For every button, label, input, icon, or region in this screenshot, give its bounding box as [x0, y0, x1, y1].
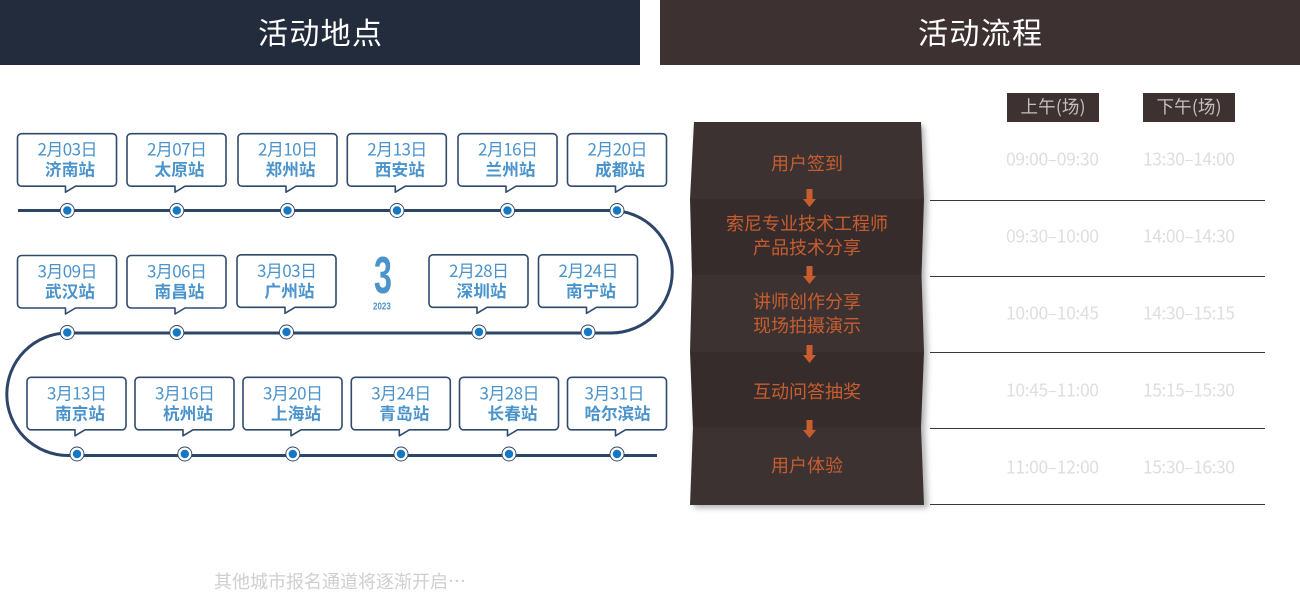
stop: 郑州站 — [238, 134, 337, 192]
times: afternoon: 15:15–15:30 — [1143, 378, 1235, 402]
stop: 南京站: 南京站 — [55, 400, 105, 424]
stop: 兰州站 — [458, 134, 557, 192]
stop: 南宁站: 南宁站 — [566, 278, 616, 302]
stop: 上海站: 上海站 — [271, 400, 321, 424]
stop: 深圳站 — [429, 255, 528, 313]
times: morning: 09:00–09:30 — [1006, 146, 1099, 172]
step text: 用户体验: 用户体验 — [771, 452, 843, 478]
times: afternoon: 15:30–16:30 — [1143, 454, 1235, 480]
stop: 兰州站: 兰州站 — [486, 157, 536, 181]
stop: 郑州站: 郑州站 — [266, 157, 316, 181]
column header: 上午(场) — [1007, 93, 1099, 122]
stop: 青岛站 — [351, 377, 450, 436]
stop: 杭州站: 杭州站 — [163, 400, 213, 424]
stop: 南宁站 — [538, 255, 638, 313]
step text: 索尼专业技术工程师 产品技术分享: 产品技术分享 — [753, 234, 861, 260]
times: morning: 11:00–12:00 — [1006, 454, 1099, 480]
step text: 索尼专业技术工程师 产品技术分享 — [726, 210, 888, 260]
stop: 广州站: 广州站 — [264, 278, 315, 302]
stop: 深圳站: 深圳站 — [456, 278, 507, 302]
times: morning: 09:30–10:00 — [1006, 224, 1099, 248]
stop: 杭州站: 3月16日 — [155, 379, 215, 404]
stop: 济南站 — [18, 134, 116, 192]
stop: 南昌站: 南昌站 — [154, 278, 205, 302]
stop: 南昌站: 3月06日 — [147, 258, 207, 282]
stop: 武汉站 — [18, 256, 116, 314]
stop: 太原站: 太原站 — [154, 157, 205, 181]
step text: 索尼专业技术工程师 产品技术分享: 索尼专业技术工程师 — [726, 210, 888, 236]
stop: 郑州站: 2月10日 — [258, 136, 318, 161]
stop: 南昌站 — [127, 256, 226, 314]
header: 活动流程: 活动流程 — [918, 9, 1042, 53]
times: morning: 10:45–11:00 — [1006, 378, 1099, 402]
stop: 西安站: 西安站 — [375, 157, 425, 181]
stop: 南宁站: 2月24日 — [558, 257, 618, 282]
times: afternoon: 14:30–15:15 — [1143, 300, 1235, 326]
route line — [7, 210, 672, 456]
stop: 广州站 — [237, 255, 336, 313]
stop: 武汉站: 武汉站 — [45, 278, 95, 302]
stop: 济南站: 2月03日 — [38, 136, 98, 161]
header: 活动流程 — [660, 0, 1300, 65]
times: morning — [1006, 146, 1099, 480]
column header: 下午(场) — [1143, 93, 1235, 122]
step text: 互动问答抽奖: 互动问答抽奖 — [753, 378, 861, 404]
step text: 用户签到: 用户签到 — [771, 150, 843, 176]
column header: 上午(场): 上午(场) — [1020, 94, 1086, 119]
stop: 杭州站 — [135, 377, 234, 436]
stop: 哈尔滨站 — [568, 377, 666, 436]
panel: folded process ribbon — [690, 122, 928, 508]
stop: 南京站: 3月13日 — [47, 379, 107, 404]
stop: 南京站 — [27, 377, 126, 436]
step text: 讲师创作分享 现场拍摄演示: 现场拍摄演示 — [753, 312, 861, 338]
stop: 成都站 — [568, 134, 666, 192]
year mark: 3 / 2023: 3 — [374, 247, 392, 305]
arrow 3 — [803, 345, 816, 363]
stop: 广州站: 3月03日 — [257, 257, 317, 282]
step text: 讲师创作分享 现场拍摄演示: 讲师创作分享 — [753, 288, 861, 314]
schedule rules — [930, 200, 1265, 504]
times: afternoon — [1143, 146, 1235, 480]
header: 活动地点 — [0, 0, 640, 65]
step text: 讲师创作分享 现场拍摄演示 — [753, 288, 861, 338]
header: 活动地点: 活动地点 — [258, 9, 382, 53]
times: afternoon: 13:30–14:00 — [1143, 146, 1235, 172]
route stops row 3 — [70, 447, 624, 461]
stop: 哈尔滨站: 3月31日 — [584, 379, 644, 404]
stop: 上海站: 3月20日 — [263, 379, 323, 404]
arrow 4 — [803, 420, 816, 438]
stop: 济南站: 济南站 — [45, 157, 95, 181]
year mark: 3 / 2023: 2023 — [373, 301, 391, 312]
stop: 青岛站: 青岛站 — [379, 400, 430, 424]
stop: 青岛站: 3月24日 — [371, 379, 431, 404]
times: morning: 10:00–10:45 — [1006, 300, 1099, 326]
route stops row 1 — [60, 204, 624, 218]
stop: 成都站: 成都站 — [595, 157, 645, 181]
stop: 武汉站: 3月09日 — [38, 258, 98, 282]
stop: 长春站: 长春站 — [488, 400, 538, 424]
times: afternoon: 14:00–14:30 — [1143, 224, 1235, 248]
note: other cities: 其他城市报名通道将逐渐开启⋯ — [214, 568, 466, 594]
stop: 太原站: 2月07日 — [147, 136, 207, 161]
stop: 太原站 — [127, 134, 226, 192]
stop: 上海站 — [243, 377, 342, 436]
stop: 成都站: 2月20日 — [588, 136, 648, 161]
arrow 2 — [803, 266, 816, 284]
route stops row 2 — [60, 325, 595, 340]
stop: 兰州站: 2月16日 — [478, 136, 538, 161]
column header: 下午(场): 下午(场) — [1156, 94, 1222, 119]
stop: 西安站: 2月13日 — [367, 136, 427, 161]
stop: 长春站 — [460, 377, 558, 436]
stop: 西安站 — [347, 134, 446, 192]
stop: 哈尔滨站: 哈尔滨站 — [584, 400, 651, 424]
stop: 长春站: 3月28日 — [480, 379, 540, 404]
stop: 深圳站: 2月28日 — [449, 257, 509, 282]
arrow 1 — [803, 189, 816, 207]
